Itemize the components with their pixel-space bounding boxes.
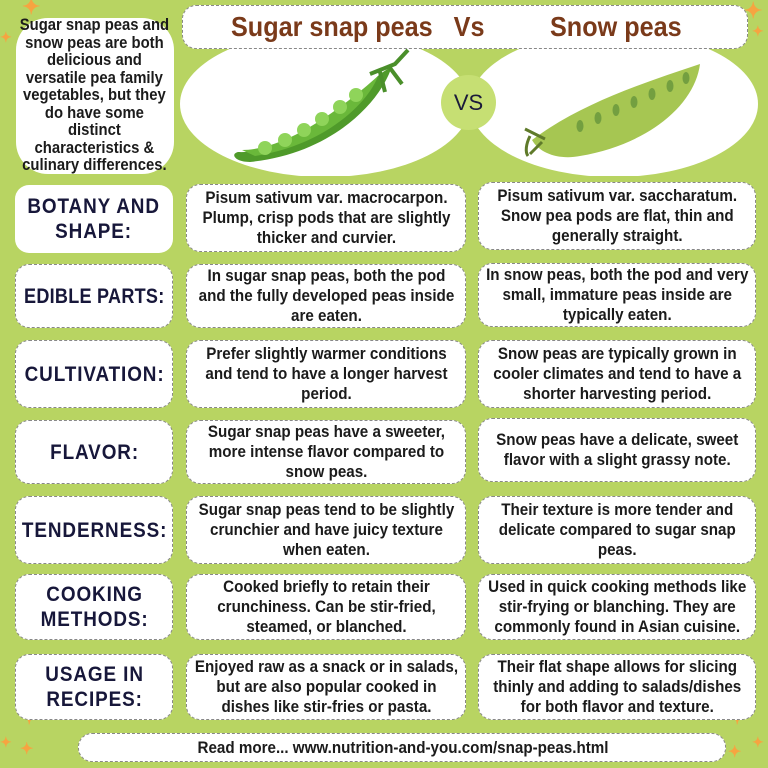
text: Snow peas are typically grown in cooler climates and tend to have a shorter harvesting period. bbox=[493, 345, 741, 403]
row: usage bbox=[15, 654, 173, 720]
row: cooking: COOKING METHODS: bbox=[41, 583, 149, 631]
text: Pisum sativum var. macrocarpon. Plump, crisp pods that are slightly thicker and curvier. bbox=[202, 189, 450, 247]
row: edible parts bbox=[15, 264, 173, 328]
text: Their flat shape allows for slicing thinly and adding to salads/dishes for both flavor and texture. bbox=[493, 658, 741, 716]
intro text: Sugar snap peas and snow peas are both delicious and versatile pea family vegetables, but they do have some distinct characteristics & culinary differences. bbox=[20, 16, 169, 174]
row: flavor bbox=[15, 420, 173, 484]
title: Snow peas bbox=[550, 11, 682, 42]
title bbox=[182, 5, 748, 49]
oval: snow pea bbox=[470, 31, 758, 177]
text: Snow peas have a delicate, sweet flavor with a slight grassy note. bbox=[496, 431, 738, 469]
row: cultivation bbox=[15, 340, 173, 408]
text: ✦ bbox=[20, 704, 38, 729]
text: ✦ bbox=[752, 734, 764, 750]
text: In sugar snap peas, both the pod and the fully developed peas inside are eaten. bbox=[199, 267, 454, 325]
footer bbox=[78, 733, 726, 762]
row: cooking bbox=[15, 574, 173, 640]
row: flavor: FLAVOR: bbox=[50, 440, 139, 464]
text: Their texture is more tender and delicate compared to sugar snap peas. bbox=[499, 501, 736, 559]
text: Prefer slightly warmer conditions and tend to have a longer harvest period. bbox=[205, 345, 448, 403]
text: Used in quick cooking methods like stir-frying or blanching. They are commonly found in Asian cuisine. bbox=[488, 578, 746, 636]
text: Sugar snap peas tend to be slightly crunchier and have juicy texture when eaten. bbox=[199, 501, 454, 559]
text: Sugar snap peas have a sweeter, more intense flavor compared to snow peas. bbox=[208, 423, 445, 481]
text: ✦ bbox=[0, 734, 12, 750]
text: ✦ bbox=[752, 23, 764, 39]
text: ✦ bbox=[728, 704, 746, 729]
row: edible parts: EDIBLE PARTS: bbox=[24, 284, 164, 308]
text: Pisum sativum var. saccharatum. Snow pea pods are flat, thin and generally straight. bbox=[497, 187, 737, 245]
row: botany: BOTANY AND SHAPE: bbox=[27, 195, 160, 243]
oval: sugar snap bbox=[180, 31, 470, 177]
row: tenderness: TENDERNESS: bbox=[22, 518, 167, 542]
text: In snow peas, both the pod and very small, immature peas inside are typically eaten. bbox=[486, 266, 748, 324]
vs badge: VS bbox=[454, 90, 483, 114]
row: tenderness bbox=[15, 496, 173, 564]
row: botany bbox=[15, 185, 173, 253]
text: ✦ bbox=[20, 741, 33, 758]
row: usage: USAGE IN RECIPES: bbox=[45, 663, 144, 711]
footer: Read more... www.nutrition-and-you.com/snap-peas.html bbox=[197, 738, 609, 756]
title: Sugar snap peas Vs bbox=[231, 11, 485, 42]
text: ✦ bbox=[728, 744, 741, 761]
text: ✦ bbox=[0, 29, 12, 45]
text: Enjoyed raw as a snack or in salads, but are also popular cooked in dishes like stir-fries or pasta. bbox=[195, 658, 458, 716]
text: Cooked briefly to retain their crunchiness. Can be stir-fried, steamed, or blanched. bbox=[217, 578, 436, 636]
vs badge bbox=[441, 75, 496, 130]
row: cultivation: CULTIVATION: bbox=[25, 362, 165, 386]
pea images panel bbox=[180, 49, 758, 176]
